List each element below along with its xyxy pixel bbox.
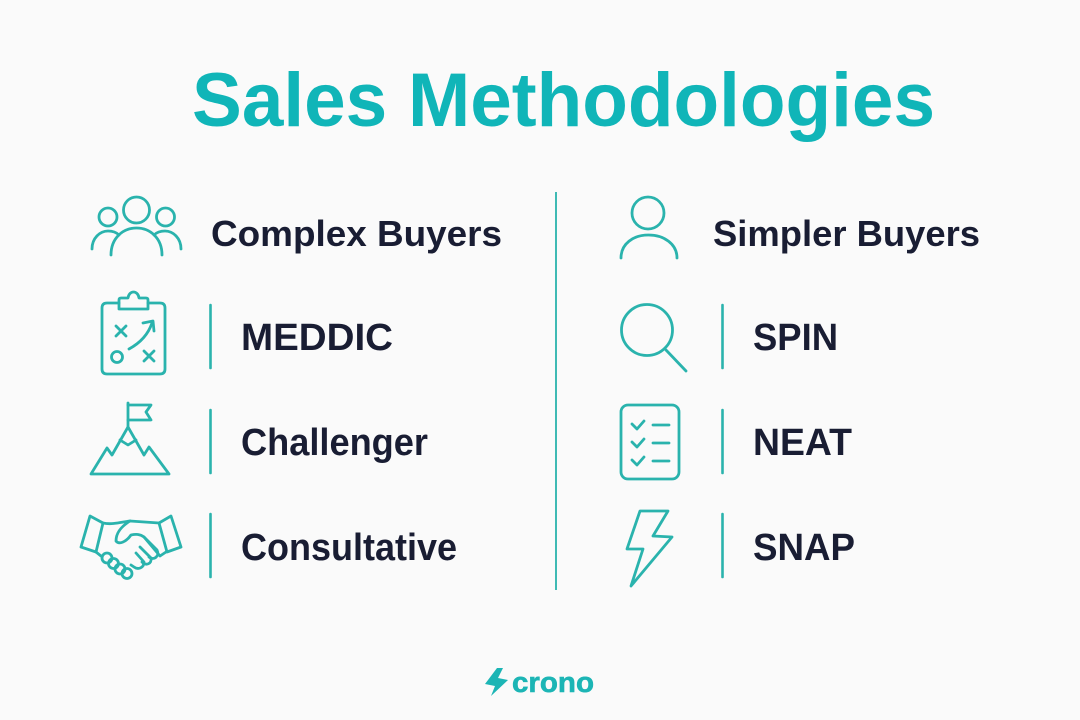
icon: single person — [621, 197, 677, 258]
icon: magnifying glass — [622, 304, 686, 371]
divider: snap — [721, 514, 724, 577]
divider: neat — [721, 410, 724, 473]
title: Sales Methodologies — [192, 58, 935, 143]
label: challenger: Challenger — [241, 422, 428, 464]
icon: handshake — [81, 516, 181, 578]
label: snap: SNAP — [753, 527, 855, 569]
logo: crono — [485, 667, 594, 699]
centre divider — [555, 192, 557, 590]
label: meddic: MEDDIC — [241, 317, 393, 359]
label: spin: SPIN — [753, 317, 838, 359]
icon: mountain with flag — [91, 403, 169, 474]
icon: logo bolt — [485, 668, 508, 696]
divider: challenger — [209, 410, 212, 473]
icon: tactics clipboard — [102, 292, 165, 374]
icon: lightning bolt — [627, 511, 672, 586]
icon: group of people — [92, 197, 181, 255]
divider: meddic — [209, 305, 212, 368]
logo wordmark: crono — [512, 667, 594, 699]
icon: checklist — [621, 405, 679, 479]
heading: simpler buyers: Simpler Buyers — [713, 213, 980, 254]
label: consultative: Consultative — [241, 527, 457, 569]
heading: complex buyers: Complex Buyers — [211, 213, 502, 254]
divider: spin — [721, 305, 724, 368]
divider: consultative — [209, 514, 212, 577]
label: neat: NEAT — [753, 422, 852, 464]
